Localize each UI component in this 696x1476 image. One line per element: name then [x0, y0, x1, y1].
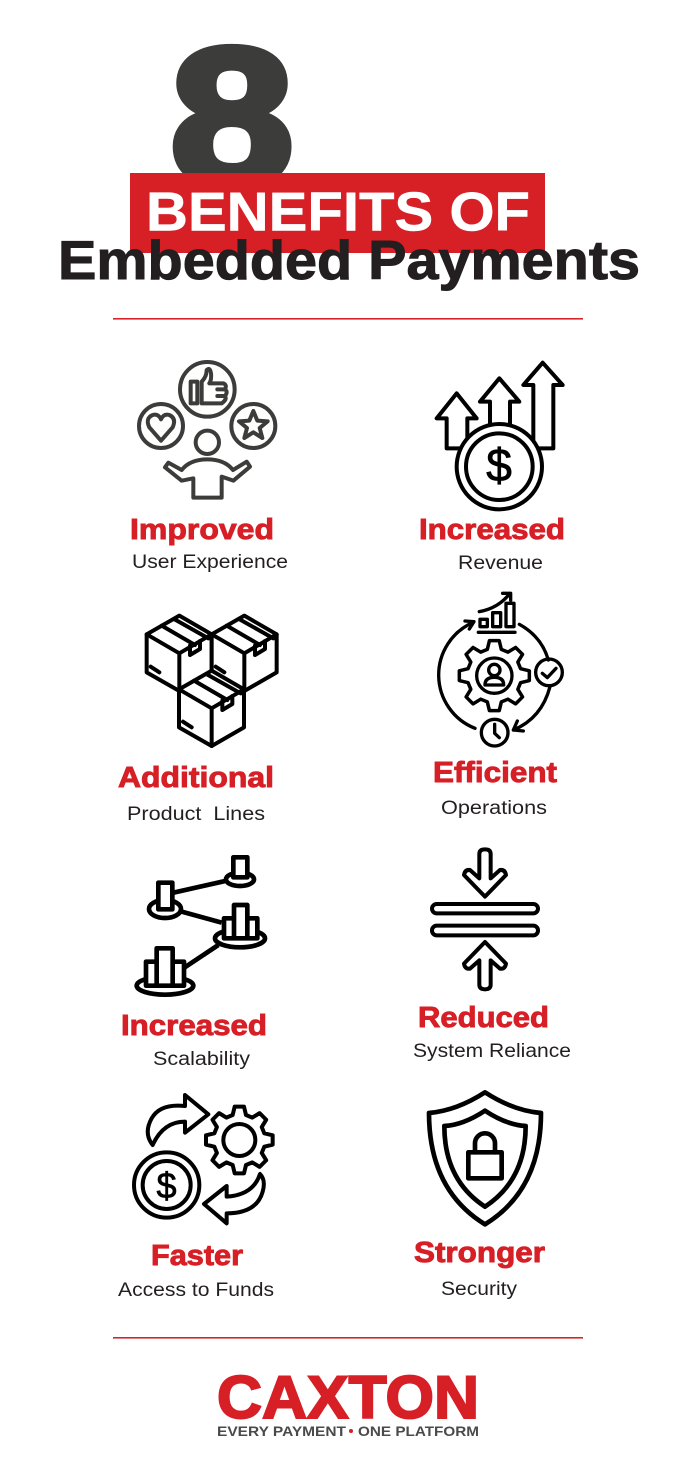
icon: three stacked boxes [147, 616, 277, 746]
label: efficient: Efficient [433, 757, 557, 789]
label: stronger: Stronger [414, 1237, 545, 1269]
heading: benefits of: BENEFITS OF [146, 180, 530, 242]
icon: connected bar chart nodes [137, 857, 265, 995]
tagline left: EVERY PAYMENT [217, 1423, 346, 1439]
label: operations: Operations [441, 798, 547, 819]
red banner [130, 173, 545, 253]
icon: shield with padlock [429, 1092, 541, 1224]
panel: reduced system reliance [413, 849, 571, 1062]
label: reduced: Reduced [418, 1002, 549, 1034]
label: increased: Increased [121, 1010, 267, 1042]
panel: efficient operations [433, 593, 562, 819]
heading: embedded payments: Embedded Payments [58, 229, 640, 291]
icon: arrows pressing on two bars [432, 849, 538, 989]
label: system reliance: System Reliance [413, 1041, 571, 1062]
logo: caxton [217, 1364, 479, 1439]
big numeral 8: 8 [170, 9, 294, 226]
panel: improved user experience [130, 362, 288, 573]
panel: increased scalability [121, 857, 267, 1070]
icon: gear cycle with chart, check and clock [439, 593, 562, 746]
panel: faster access to funds [118, 1095, 274, 1301]
icon: coin and gear with exchange arrows [134, 1095, 273, 1223]
tagline right: ONE PLATFORM [358, 1423, 479, 1439]
label: user experience: User Experience [132, 552, 288, 573]
icon: person with thumbs up, heart and star [139, 362, 275, 498]
label: improved: Improved [130, 514, 274, 546]
label: faster: Faster [151, 1240, 243, 1272]
icon: rising arrows with dollar coin [437, 363, 563, 509]
panel: increased revenue [419, 363, 565, 574]
label: access to funds: Access to Funds [118, 1280, 274, 1301]
label: product lines: Product Lines [127, 804, 265, 825]
title block [58, 9, 640, 291]
dollar sign: $ [156, 1165, 177, 1206]
panel: additional product lines [118, 616, 277, 825]
dollar sign: $ [486, 439, 512, 491]
label: scalability: Scalability [153, 1049, 251, 1070]
label: additional: Additional [118, 762, 274, 794]
tagline dot [349, 1429, 353, 1433]
label: security: Security [441, 1279, 518, 1300]
panel: stronger security [414, 1092, 545, 1300]
label: revenue: Revenue [458, 553, 543, 574]
wordmark: CAXTON [217, 1364, 479, 1431]
label: increased: Increased [419, 514, 565, 546]
